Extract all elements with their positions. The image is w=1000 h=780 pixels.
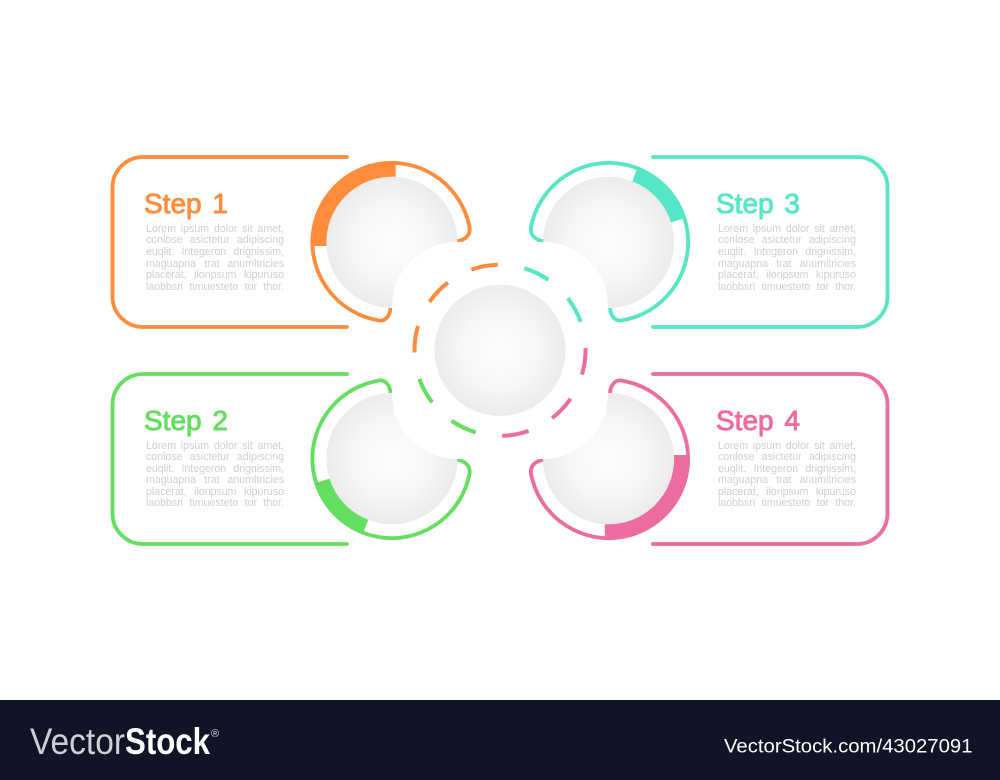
text block: step 1 — [146, 223, 284, 293]
text block: step 4 — [718, 440, 856, 509]
heading: step 2: Step 2 — [144, 405, 228, 436]
text block: step 3: laobbsri timuesteto tor thor. — [718, 281, 856, 293]
logo wordmark: Vector — [30, 721, 125, 762]
ring: step 4 — [531, 380, 688, 538]
text block: step 1: conlose asictetur adipiscing — [146, 234, 284, 246]
sphere: step 1 — [326, 177, 458, 308]
text block: step 2: conlose asictetur adipiscing — [146, 451, 284, 463]
ring: step 2 — [312, 380, 470, 538]
text block: step 3: maguapna trat anumltricies — [718, 258, 856, 270]
rounded frame: step 3 — [653, 157, 888, 327]
text block: step 1: placerat, ilonpsum kipuruso — [146, 269, 284, 281]
central hub — [392, 242, 608, 459]
heading: step 1: Step 1 — [144, 188, 228, 219]
progress segment: step 2 — [315, 479, 368, 534]
text block: step 2 — [146, 440, 284, 509]
logo wordmark — [30, 721, 219, 762]
dashed ring — [414, 265, 586, 436]
sphere: step 3 — [543, 177, 674, 308]
ring: step 3 — [531, 163, 688, 321]
text block: step 2: Lorem ipsum dolor sit amet, — [146, 440, 284, 452]
progress segment: step 1 — [311, 161, 396, 246]
central sphere — [434, 285, 566, 416]
progress segment: step 3 — [632, 167, 686, 222]
heading: step 4: Step 4 — [716, 405, 800, 436]
text block: step 1: euqlit. Integeron drignissim, — [146, 246, 284, 258]
text block: step 2: placerat, ilonpsum kipuruso — [146, 486, 284, 498]
text block: step 4: Lorem ipsum dolor sit amet, — [718, 440, 856, 452]
text block: step 3: Lorem ipsum dolor sit amet, — [718, 223, 856, 235]
text block: step 4: laobbsri timuesteto tor thor. — [718, 497, 856, 509]
rounded frame: step 2 — [112, 374, 347, 544]
image id: VectorStock.com/43027091 — [724, 736, 972, 758]
text block: step 3 — [718, 223, 856, 293]
white rounded backing — [392, 242, 608, 459]
text block: step 3: euqlit. Integeron drignissim, — [718, 246, 856, 258]
text block: step 1: maguapna trat anumltricies — [146, 258, 284, 270]
text block: step 4: maguapna trat anumltricies — [718, 474, 856, 486]
rounded frame: step 4 — [653, 374, 888, 544]
text block: step 4: euqlit. Integeron drignissim, — [718, 463, 856, 475]
panel: step 2 — [110, 372, 472, 546]
text block: step 1: laobbsri timuesteto tor thor. — [146, 281, 284, 293]
text block: step 4: conlose asictetur adipiscing — [718, 451, 856, 463]
text block: step 4: placerat, ilonpsum kipuruso — [718, 486, 856, 498]
ring: step 1 — [312, 163, 470, 321]
text block: step 2: euqlit. Integeron drignissim, — [146, 463, 284, 475]
text block: step 1: Lorem ipsum dolor sit amet, — [146, 223, 284, 235]
text block: step 2: laobbsri timuesteto tor thor. — [146, 497, 284, 509]
text block: step 2: maguapna trat anumltricies — [146, 474, 284, 486]
text block: step 3: conlose asictetur adipiscing — [718, 234, 856, 246]
logo wordmark: Stock — [125, 721, 210, 762]
logo wordmark: ® — [211, 728, 219, 740]
panel: step 1 — [110, 155, 472, 329]
sphere: step 4 — [543, 393, 674, 524]
text block: step 3: placerat, ilonpsum kipuruso — [718, 269, 856, 281]
panel: step 4 — [528, 372, 890, 546]
progress segment: step 4 — [605, 455, 689, 540]
rounded frame: step 1 — [112, 157, 347, 327]
footer bar — [0, 700, 1000, 780]
heading: step 3: Step 3 — [716, 188, 800, 219]
panel: step 3 — [528, 155, 890, 329]
sphere: step 2 — [326, 393, 458, 524]
